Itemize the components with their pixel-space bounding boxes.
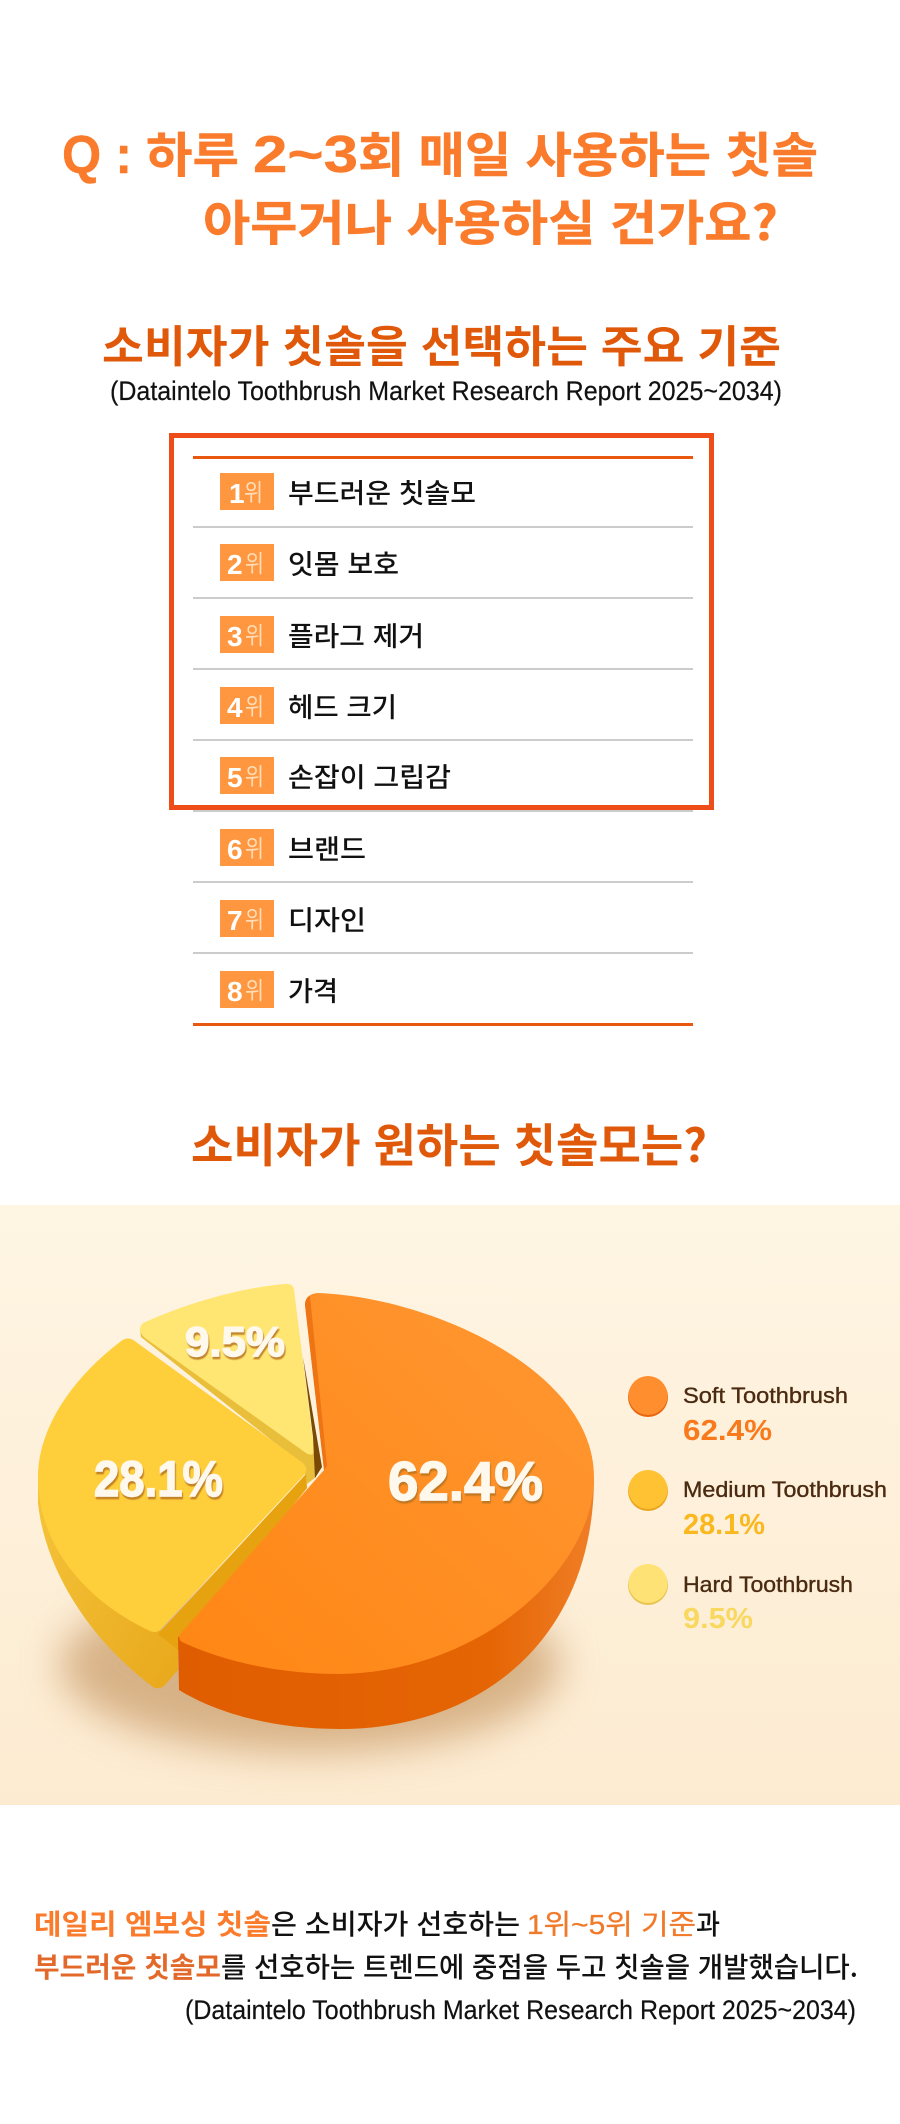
- title: question: 아무거나 사용하실 건가요?: [203, 184, 778, 254]
- conclusion text: 은 소비자가 선호하는: [271, 1903, 520, 1943]
- slice: hard 9.5%: [140, 1284, 316, 1484]
- rank 7: [220, 899, 366, 938]
- legend: medium: Medium Toothbrush: [683, 1477, 887, 1502]
- label: 28.1%: 28.1%: [94, 1451, 223, 1507]
- rank 2: 위: [245, 544, 264, 579]
- label: 62.4%: 62.4%: [388, 1450, 543, 1512]
- rank 8: 위: [245, 971, 264, 1006]
- conclusion text: 를 선호하는 트렌드에 중점을 두고 칫솔을 개발했습니다.: [221, 1946, 858, 1986]
- rank 2: [220, 543, 399, 582]
- highlight box: top five: [172, 436, 712, 808]
- rank 1: 1: [229, 478, 245, 509]
- rank 4: 위: [245, 687, 264, 722]
- rank 6: 6: [227, 834, 243, 865]
- rank 1: 부드러운 칫솔모: [288, 472, 476, 511]
- rank 4: 4: [227, 692, 243, 723]
- legend: hard: 9.5%: [683, 1603, 753, 1635]
- slice gap shadow: [303, 1357, 322, 1478]
- rank 7: 7: [227, 905, 243, 936]
- rank 1: 위: [244, 473, 263, 508]
- legend: medium: [628, 1470, 887, 1541]
- rank 5: 5: [227, 762, 243, 793]
- ranking list: [193, 456, 693, 1026]
- title: question: 하루: [146, 116, 239, 186]
- rank 3: 플라그 제거: [288, 615, 424, 654]
- source note: bottom: (Dataintelo Toothbrush Market Research Report 2025~2034): [185, 1995, 856, 2025]
- legend: hard: [628, 1564, 853, 1635]
- heading: selection criteria: 소비자가 칫솔을 선택하는 주요 기준: [102, 311, 781, 375]
- rank 7: 디자인: [288, 899, 366, 938]
- conclusion text: 1위~5위 기준: [527, 1909, 696, 1940]
- rank 6: 위: [245, 829, 264, 864]
- rank 6: 브랜드: [288, 828, 366, 867]
- label: 9.5%: 9.5%: [185, 1318, 285, 1365]
- rank 8: [220, 970, 338, 1009]
- rank 3: [220, 615, 424, 654]
- rank 8: 가격: [288, 970, 338, 1009]
- title: question: [62, 116, 818, 254]
- rank 4: 헤드 크기: [288, 686, 397, 725]
- rank 5: [220, 756, 451, 795]
- legend: medium: 28.1%: [683, 1509, 765, 1541]
- heading: preferred bristles: 소비자가 원하는 칫솔모는?: [191, 1110, 707, 1176]
- rank 6: [220, 828, 366, 867]
- pie chart: [38, 1284, 594, 1753]
- conclusion text: 데일리 엠보싱 칫솔: [34, 1903, 271, 1943]
- legend: [628, 1376, 887, 1635]
- rank 8: 8: [227, 976, 243, 1007]
- title: question: Q :: [62, 125, 132, 185]
- rank 5: 손잡이 그립감: [288, 756, 451, 795]
- conclusion text: [34, 1903, 858, 1986]
- rank 2: 2: [227, 549, 243, 580]
- slice: medium 28.1%: [38, 1338, 307, 1688]
- legend: hard: Hard Toothbrush: [683, 1572, 853, 1597]
- rank 2: 잇몸 보호: [288, 543, 399, 582]
- legend: soft: [628, 1376, 848, 1447]
- slice: soft 62.4%: [178, 1293, 594, 1729]
- source note: top: (Dataintelo Toothbrush Market Research Report 2025~2034): [110, 376, 782, 406]
- rank 5: 위: [245, 757, 264, 792]
- panel: pie chart background: [0, 1205, 900, 1805]
- rank 7: 위: [245, 900, 264, 935]
- rank 3: 3: [227, 621, 243, 652]
- legend: soft: 62.4%: [683, 1415, 772, 1447]
- title: question: 회 매일 사용하는 칫솔: [358, 116, 818, 186]
- title: question: 2~3: [253, 126, 358, 184]
- rank 4: [220, 686, 397, 725]
- conclusion text: 과: [696, 1903, 720, 1943]
- legend: soft: Soft Toothbrush: [683, 1383, 848, 1408]
- conclusion text: 부드러운 칫솔모: [34, 1946, 221, 1986]
- rank 3: 위: [245, 616, 264, 651]
